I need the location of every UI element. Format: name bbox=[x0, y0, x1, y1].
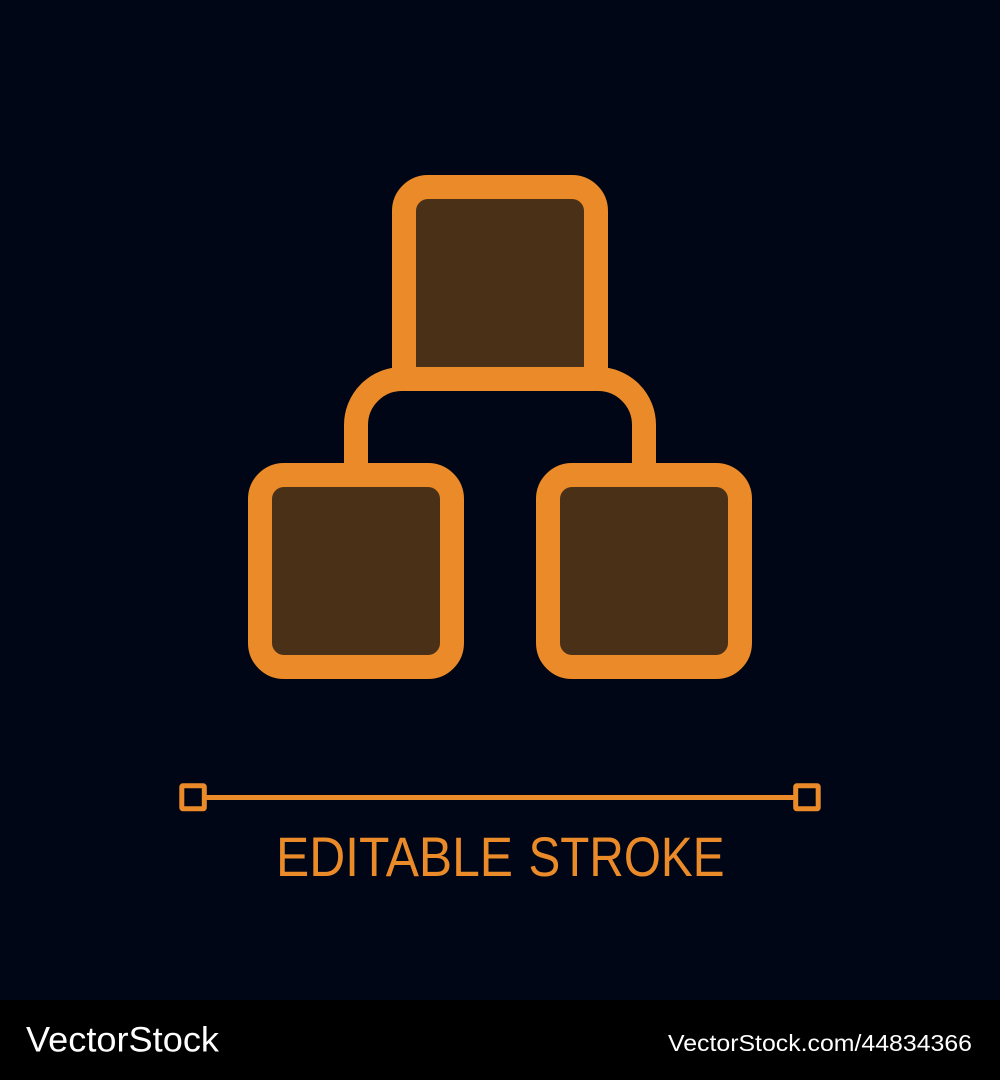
left box bbox=[260, 475, 452, 667]
right handle bbox=[796, 786, 818, 809]
left handle bbox=[182, 786, 204, 809]
footer url: VectorStock.com/44834366 bbox=[668, 1030, 972, 1056]
icon: hierarchy diagram bbox=[260, 187, 740, 667]
stroke width indicator bbox=[182, 786, 818, 809]
connector arc bbox=[356, 379, 644, 470]
indicator line bbox=[205, 795, 795, 800]
right box bbox=[548, 475, 740, 667]
top box bbox=[404, 187, 596, 379]
caption: editable stroke bbox=[276, 825, 724, 888]
footer logo: VectorStock bbox=[26, 1020, 220, 1060]
footer bar bbox=[0, 1000, 1000, 1080]
caption: editable stroke: STROKE bbox=[528, 825, 724, 888]
caption: editable stroke: EDITABLE bbox=[276, 825, 513, 888]
